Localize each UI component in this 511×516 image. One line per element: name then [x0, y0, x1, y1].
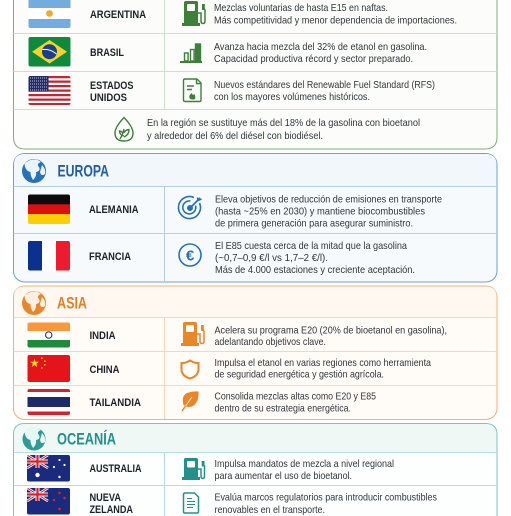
text: India	[214, 326, 447, 348]
flag: China	[28, 355, 70, 382]
text: Tailandia: Consolida mezclas altas como E20 y E85	[214, 392, 376, 402]
text: Argentina: Mezclas voluntarias de hasta E15 en naftas.	[214, 3, 388, 14]
text: Estados Unidos: Nuevos estándares del Renewable Fuel Standard (RFS)	[214, 80, 435, 91]
country: Estados Unidos	[90, 80, 134, 104]
text: Nueva Zelanda: Evalúa marcos regulatorios para introducir combustibles	[214, 492, 437, 504]
text: Tailandia: dentro de su estrategia energética.	[214, 404, 351, 414]
icon: fuel pump	[182, 1, 205, 26]
country: Francia: FRANCIA	[89, 251, 131, 263]
icon: globe	[22, 291, 46, 315]
icon: euro	[179, 244, 201, 266]
heading: Oceanía: OCEANÍA	[57, 430, 116, 448]
icon: globe	[22, 159, 46, 183]
flag: Argentina	[28, 0, 70, 28]
text: Alemania	[215, 194, 442, 230]
panel: América	[14, 0, 497, 149]
country: Nueva Zelanda: ZELANDA	[90, 504, 133, 516]
heading: Asia: ASIA	[57, 294, 87, 312]
flag: Estados Unidos	[28, 76, 71, 105]
country: Brasil: BRASIL	[90, 47, 124, 59]
panel: Europa	[14, 154, 497, 282]
callout: regional summary	[147, 118, 420, 142]
text: Francia: (~0,7–0,9 €/l vs 1,7–2 €/l).	[215, 253, 328, 264]
text: Estados Unidos: con los mayores volúmenes históricos.	[214, 92, 370, 103]
text: Alemania: Eleva objetivos de reducción de emisiones en transporte	[215, 194, 442, 206]
icon: globe	[22, 427, 46, 450]
text: India: adelantando objetivos clave.	[214, 337, 326, 348]
country: Nueva Zelanda: NUEVA	[90, 492, 121, 504]
flag: India	[28, 322, 70, 348]
text: Brasil: Avanza hacia mezcla del 32% de etanol en gasolina.	[214, 42, 427, 53]
text: Alemania: (hasta ~25% en 2030) y mantiene biocombustibles	[215, 206, 425, 218]
text: India: Acelera su programa E20 (20% de bioetanol en gasolina),	[214, 326, 447, 336]
country: Argentina: ARGENTINA	[90, 9, 146, 21]
text: Alemania: de primera generación para asegurar suministro.	[215, 218, 413, 230]
country: Alemania: ALEMANIA	[89, 204, 138, 216]
icon: document with flame	[184, 79, 201, 102]
text: Brasil	[214, 42, 427, 65]
country: Estados Unidos: ESTADOS	[90, 80, 134, 92]
country: India: INDIA	[90, 330, 116, 342]
text: Francia: El E85 cuesta cerca de la mitad que la gasolina	[215, 241, 407, 252]
text: Francia: Más de 4.000 estaciones y creciente aceptación.	[215, 265, 415, 276]
flag: Tailandia	[28, 389, 70, 415]
text: Tailandia	[214, 392, 376, 414]
text: Francia	[215, 241, 415, 276]
flag: Australia	[27, 455, 70, 482]
text: Argentina	[214, 3, 457, 26]
flag: Francia	[28, 241, 70, 270]
country: Estados Unidos: UNIDOS	[90, 92, 127, 104]
text: Argentina: Más competitividad y menor dependencia de importaciones.	[214, 16, 457, 26]
panel: Asia	[14, 286, 497, 420]
icon: leaf	[182, 391, 199, 411]
flag: Nueva Zelanda	[27, 488, 70, 514]
callout: regional summary: y alrededor del 6% del diésel con biodiésel.	[147, 131, 323, 142]
icon: fuel pump	[182, 458, 204, 480]
icon: shield	[182, 360, 198, 378]
country: Australia: AUSTRALIA	[90, 463, 142, 475]
text: China: de seguridad energética y gestión agrícola.	[214, 370, 384, 380]
callout: regional summary: En la región se sustituye más del 18% de la gasolina con bioetanol	[147, 118, 420, 129]
icon: target	[178, 197, 202, 219]
icon: fuel pump	[181, 322, 204, 346]
panel: Oceanía	[14, 424, 497, 516]
heading: Europa: EUROPA	[58, 162, 109, 180]
text: Australia	[214, 459, 394, 482]
text: Brasil: Capacidad productiva récord y sector preparado.	[214, 54, 413, 65]
flag: Brasil	[28, 37, 70, 66]
icon: bar chart	[180, 44, 202, 62]
text: Nueva Zelanda	[214, 492, 437, 516]
text: Nueva Zelanda: renovables en el transporte.	[214, 505, 325, 516]
text: China: Impulsa el etanol en varias regiones como herramienta	[214, 358, 431, 369]
text: Estados Unidos	[214, 80, 435, 103]
flag: Alemania	[28, 194, 70, 224]
text: China	[214, 358, 431, 380]
country: Tailandia: TAILANDIA	[90, 397, 141, 409]
country: China: CHINA	[90, 364, 120, 376]
text: Australia: para aumentar el uso de bioetanol.	[214, 471, 352, 482]
icon: document	[184, 493, 198, 513]
icon: euro: €	[186, 248, 195, 264]
country: Nueva Zelanda	[90, 492, 133, 516]
text: Australia: Impulsa mandatos de mezcla a nivel regional	[214, 459, 394, 470]
icon: leaf drop	[115, 118, 133, 141]
